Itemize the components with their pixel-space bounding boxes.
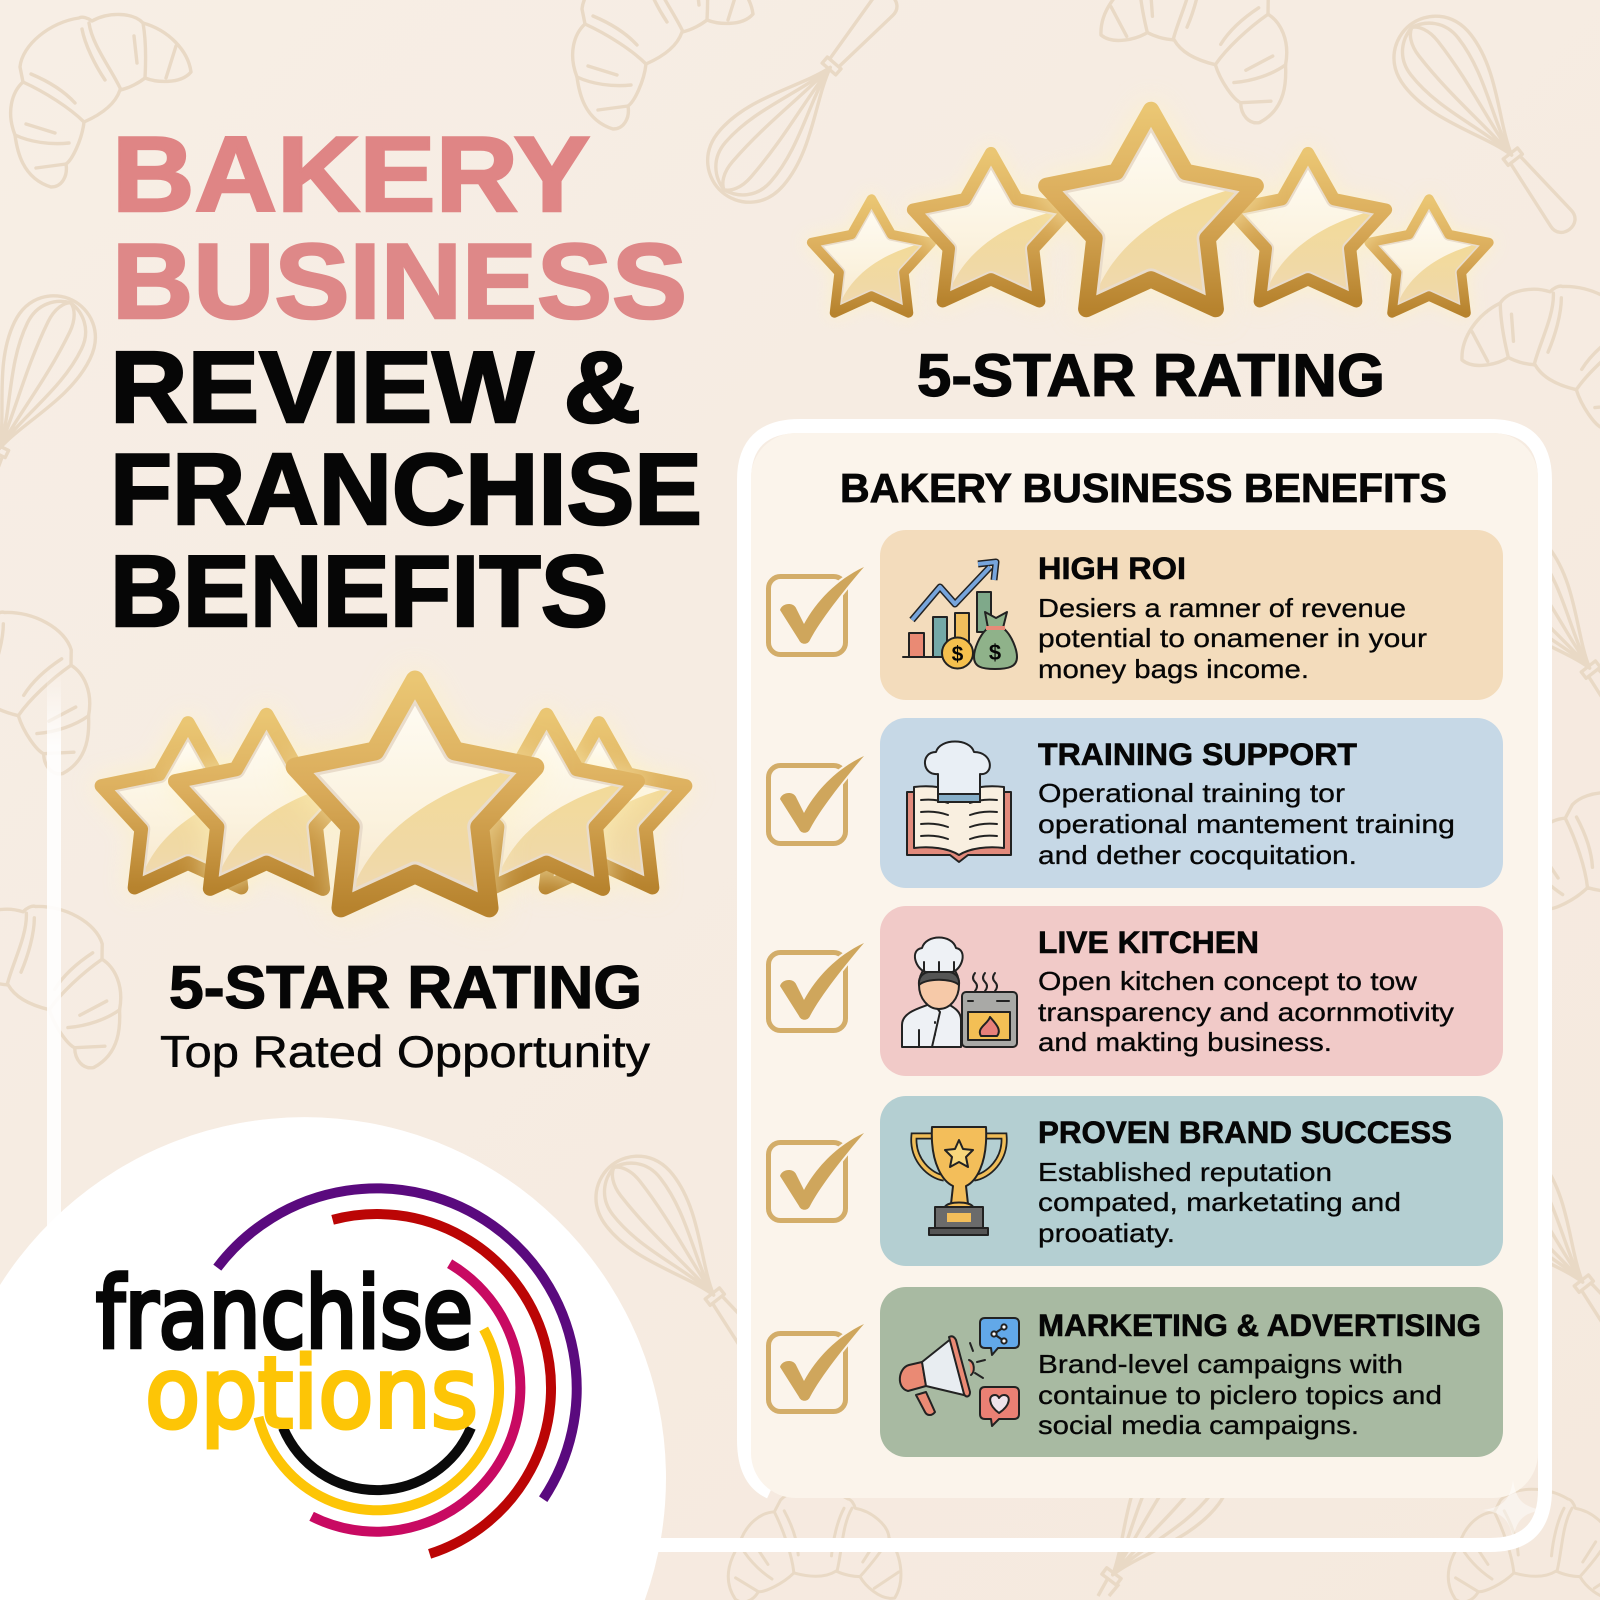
text: live kitchen: Open kitchen concept to tow <box>1038 966 1417 996</box>
icon: chef and oven <box>902 938 1017 1047</box>
text: live kitchen: LIVE KITCHEN <box>1038 924 1259 960</box>
logo wordmark: options <box>145 1337 478 1451</box>
text: training support <box>1038 736 1455 870</box>
card background <box>880 1096 1503 1266</box>
checkbox <box>768 1133 864 1220</box>
left rating label: Top Rated Opportunity <box>160 1028 651 1077</box>
icon: chart and money bag <box>903 562 1017 669</box>
text: training support: TRAINING SUPPORT <box>1038 736 1357 772</box>
row: proven brand success <box>768 1096 1503 1266</box>
card background <box>880 906 1503 1076</box>
card background <box>880 718 1503 888</box>
icon: megaphone and social bubbles <box>900 1318 1019 1426</box>
row: training support <box>768 718 1503 888</box>
left five-star group <box>97 680 690 932</box>
logo wordmark <box>96 1257 478 1451</box>
title: BAKERY <box>112 114 590 234</box>
panel heading: BAKERY BUSINESS BENEFITS <box>840 465 1447 511</box>
white frame <box>47 426 1545 1545</box>
left rating label: 5-STAR RATING <box>169 954 642 1021</box>
text: live kitchen: transparency and acornmotivity <box>1038 997 1454 1027</box>
card background <box>880 530 1503 700</box>
left rating label <box>160 954 651 1077</box>
text: high roi: HIGH ROI <box>1038 550 1186 586</box>
title: BUSINESS <box>112 221 687 341</box>
text: high roi: money bags income. <box>1038 654 1309 684</box>
logo wordmark: franchise <box>96 1257 473 1371</box>
logo: franchise options <box>0 1117 666 1600</box>
icon: book and chef hat <box>907 742 1011 862</box>
text: training support: operational mantement training <box>1038 809 1455 839</box>
sparkle mark <box>1483 1480 1543 1540</box>
text: training support: and dether cocquitation. <box>1038 840 1357 870</box>
text: proven brand success: prooatiaty. <box>1038 1218 1175 1248</box>
text: high roi <box>1038 550 1427 684</box>
right rating label: 5-STAR RATING <box>917 342 1385 409</box>
text: marketing and advertising: social media campaigns. <box>1038 1410 1359 1440</box>
checkbox <box>768 567 864 654</box>
text: proven brand success: Established reputation <box>1038 1157 1332 1187</box>
row: marketing and advertising <box>768 1287 1503 1457</box>
logo arcs <box>217 1188 577 1554</box>
checkbox <box>768 1324 864 1412</box>
text: marketing and advertising: containue to piclero topics and <box>1038 1380 1442 1410</box>
title: BENEFITS <box>110 536 608 648</box>
text: marketing and advertising: Brand-level campaigns with <box>1038 1349 1403 1379</box>
text: high roi: potential to onamener in your <box>1038 623 1427 653</box>
panel: bakery business benefits <box>751 433 1538 1498</box>
text: live kitchen <box>1038 924 1454 1057</box>
text: training support: Operational training tor <box>1038 778 1345 808</box>
title: REVIEW & <box>110 332 641 444</box>
text: proven brand success: PROVEN BRAND SUCCESS <box>1038 1114 1452 1150</box>
icon: trophy <box>914 1127 1004 1235</box>
text: marketing and advertising <box>1038 1307 1481 1440</box>
row: high roi <box>768 530 1503 700</box>
text: marketing and advertising: MARKETING & ADVERTISING <box>1038 1307 1481 1343</box>
checkbox <box>768 756 864 844</box>
right five-star group <box>808 110 1492 330</box>
title: FRANCHISE <box>110 434 702 546</box>
text: high roi: Desiers a ramner of revenue <box>1038 593 1406 623</box>
title <box>110 114 702 648</box>
text: live kitchen: and makting business. <box>1038 1027 1332 1057</box>
icon: chart and money bag: $ <box>952 643 964 666</box>
icon: chart and money bag: $ <box>989 640 1001 665</box>
text: proven brand success: compated, marketating and <box>1038 1187 1401 1217</box>
text: proven brand success <box>1038 1114 1452 1248</box>
checkbox <box>768 943 864 1030</box>
row: live kitchen <box>768 906 1503 1076</box>
card background <box>880 1287 1503 1457</box>
